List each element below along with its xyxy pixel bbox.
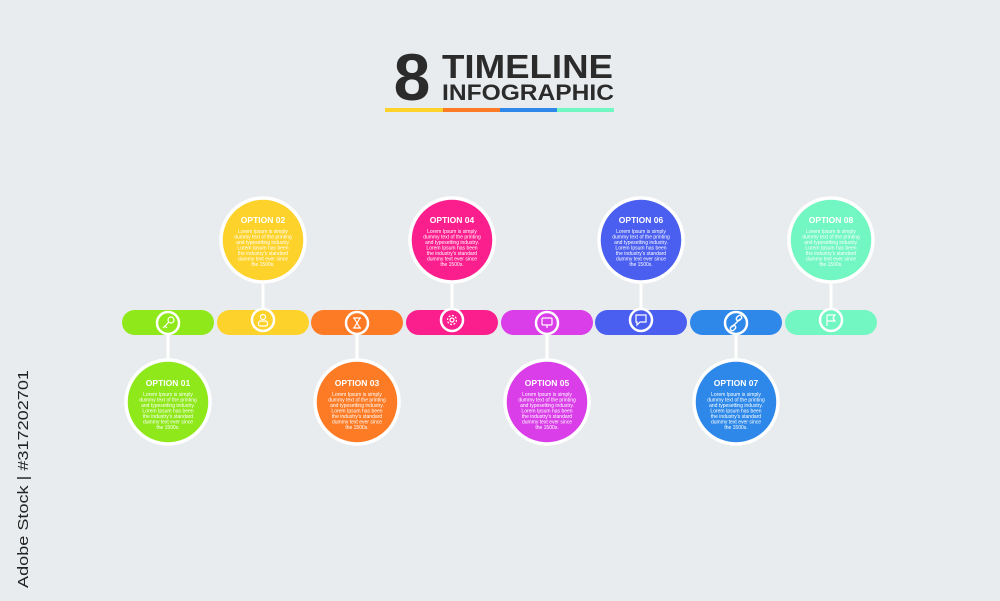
timeline step 2: [217, 198, 309, 335]
timeline step 5: the 1500s.: [535, 425, 559, 431]
timeline step 4: dummy text of the printing: [423, 234, 481, 240]
timeline step 7: dummy text of the printing: [707, 398, 765, 404]
timeline step 4: Lorem Ipsum has been: [426, 246, 478, 252]
timeline step 5: OPTION 05: [525, 378, 569, 388]
timeline step 6: dummy text ever since: [616, 256, 666, 262]
timeline step 2: the industry's standard: [238, 251, 288, 257]
timeline step 6: Lorem Ipsum has been: [615, 246, 667, 252]
timeline step 5: Lorem Ipsum is simply: [522, 392, 572, 398]
timeline step 2: Lorem Ipsum has been: [237, 246, 289, 252]
timeline step 1: Lorem Ipsum is simply: [143, 392, 193, 398]
timeline step 4: the 1500s.: [440, 262, 464, 268]
title: 8: [394, 40, 430, 114]
timeline step 2: dummy text of the printing: [234, 234, 292, 240]
timeline step 3: [311, 310, 403, 444]
timeline step 3: dummy text of the printing: [328, 398, 386, 404]
timeline step 3: OPTION 03: [335, 378, 379, 388]
timeline step 1: Lorem Ipsum has been: [142, 408, 194, 414]
timeline step 7: [690, 310, 782, 444]
timeline step 5: dummy text of the printing: [518, 398, 576, 404]
timeline step 4: the industry's standard: [427, 251, 477, 257]
timeline step 1: the 1500s.: [156, 425, 180, 431]
timeline step 5: dummy text ever since: [522, 420, 572, 426]
timeline step 5: [501, 310, 593, 444]
title: INFOGRAPHIC: [442, 80, 614, 105]
timeline step 1: [122, 310, 214, 444]
timeline step 6: Lorem Ipsum is simply: [616, 229, 666, 235]
timeline step 7: and typesetting industry.: [709, 403, 763, 409]
timeline step 1: and typesetting industry.: [141, 403, 195, 409]
timeline step 5: and typesetting industry.: [520, 403, 574, 409]
timeline step 4: [406, 198, 498, 335]
icon: key: [163, 317, 174, 328]
timeline step 7: dummy text ever since: [711, 420, 761, 426]
icon: hourglass: [353, 318, 361, 328]
timeline step 2: OPTION 02: [241, 215, 285, 225]
timeline step 3: the 1500s.: [345, 425, 369, 431]
timeline step 8: the 1500s.: [819, 262, 843, 268]
timeline step 4: and typesetting industry.: [425, 240, 479, 246]
timeline step 2: and typesetting industry.: [236, 240, 290, 246]
icon: gear: [448, 316, 456, 324]
timeline step 7: Lorem Ipsum is simply: [711, 392, 761, 398]
timeline step 3: Lorem Ipsum has been: [331, 408, 383, 414]
timeline step 8: Lorem Ipsum is simply: [806, 229, 856, 235]
timeline step 2: the 1500s.: [251, 262, 275, 268]
timeline step 1: dummy text ever since: [143, 420, 193, 426]
timeline step 6: the 1500s.: [629, 262, 653, 268]
timeline step 2: dummy text ever since: [238, 256, 288, 262]
timeline step 1: the industry's standard: [143, 414, 193, 420]
timeline step 7: the 1500s.: [724, 425, 748, 431]
title: TIMELINE: [442, 48, 613, 85]
icon: flag: [827, 315, 835, 326]
timeline step 6: dummy text of the printing: [612, 234, 670, 240]
timeline step 7: the industry's standard: [711, 414, 761, 420]
title: [385, 40, 614, 114]
timeline step 6: and typesetting industry.: [614, 240, 668, 246]
timeline step 4: Lorem Ipsum is simply: [427, 229, 477, 235]
timeline step 3: Lorem Ipsum is simply: [332, 392, 382, 398]
timeline step 3: and typesetting industry.: [330, 403, 384, 409]
icon: monitor: [542, 318, 552, 328]
timeline step 8: OPTION 08: [809, 215, 853, 225]
timeline step 8: dummy text ever since: [806, 256, 856, 262]
watermark side text: Adobe Stock | #317202701: [15, 370, 32, 588]
icon: chat bubble: [636, 315, 646, 325]
timeline step 8: and typesetting industry.: [804, 240, 858, 246]
timeline step 8: the industry's standard: [806, 251, 856, 257]
timeline step 1: OPTION 01: [146, 378, 190, 388]
timeline step 4: OPTION 04: [430, 215, 474, 225]
timeline step 3: the industry's standard: [332, 414, 382, 420]
timeline step 7: Lorem Ipsum has been: [710, 408, 762, 414]
timeline step 6: [595, 198, 687, 335]
timeline step 5: the industry's standard: [522, 414, 572, 420]
timeline step 7: OPTION 07: [714, 378, 758, 388]
icon: link: [729, 314, 743, 332]
timeline step 8: [785, 198, 877, 335]
timeline step 8: dummy text of the printing: [802, 234, 860, 240]
timeline step 6: OPTION 06: [619, 215, 663, 225]
icon: person: [258, 314, 268, 326]
timeline step 3: dummy text ever since: [332, 420, 382, 426]
timeline step 1: dummy text of the printing: [139, 398, 197, 404]
timeline step 6: the industry's standard: [616, 251, 666, 257]
timeline step 4: dummy text ever since: [427, 256, 477, 262]
timeline step 5: Lorem Ipsum has been: [521, 408, 573, 414]
timeline step 2: Lorem Ipsum is simply: [238, 229, 288, 235]
timeline step 8: Lorem Ipsum has been: [805, 246, 857, 252]
